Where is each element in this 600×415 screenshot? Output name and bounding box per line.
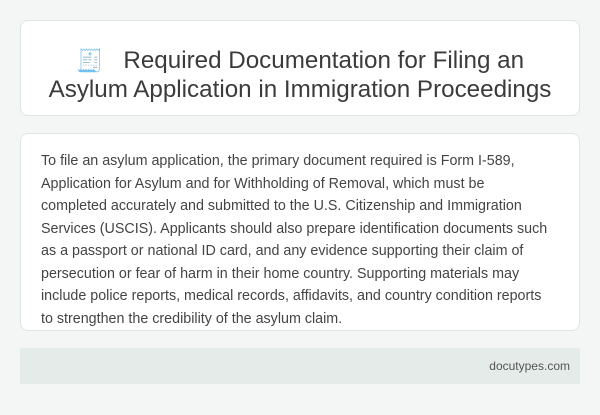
footer: docutypes.com: [489, 359, 570, 373]
body text: [41, 153, 547, 326]
panel: description: [20, 133, 580, 331]
title panel: [20, 20, 580, 116]
footer: [20, 348, 580, 384]
title: Asylum Application in Immigration Proceedings: [49, 76, 551, 103]
body text: To file an asylum application, the primary document required is Form I-589,: [41, 153, 515, 169]
body text: Application for Asylum and for Withholding of Removal, which must be: [41, 176, 484, 192]
body text: include police reports, medical records, affidavits, and country condition reports: [41, 288, 541, 304]
body text: as a passport or national ID card, and any evidence supporting their claim of: [41, 243, 523, 259]
body text: to strengthen the credibility of the asylum claim.: [41, 310, 342, 326]
body text: persecution or fear of harm in their home country. Supporting materials may: [41, 266, 519, 282]
title: [48, 47, 551, 103]
body text: completed accurately and submitted to the U.S. Citizenship and Immigration: [41, 198, 522, 214]
title: 🧾 Required Documentation for Filing an: [76, 47, 524, 74]
body text: Services (USCIS). Applicants should also prepare identification documents such: [41, 220, 547, 236]
